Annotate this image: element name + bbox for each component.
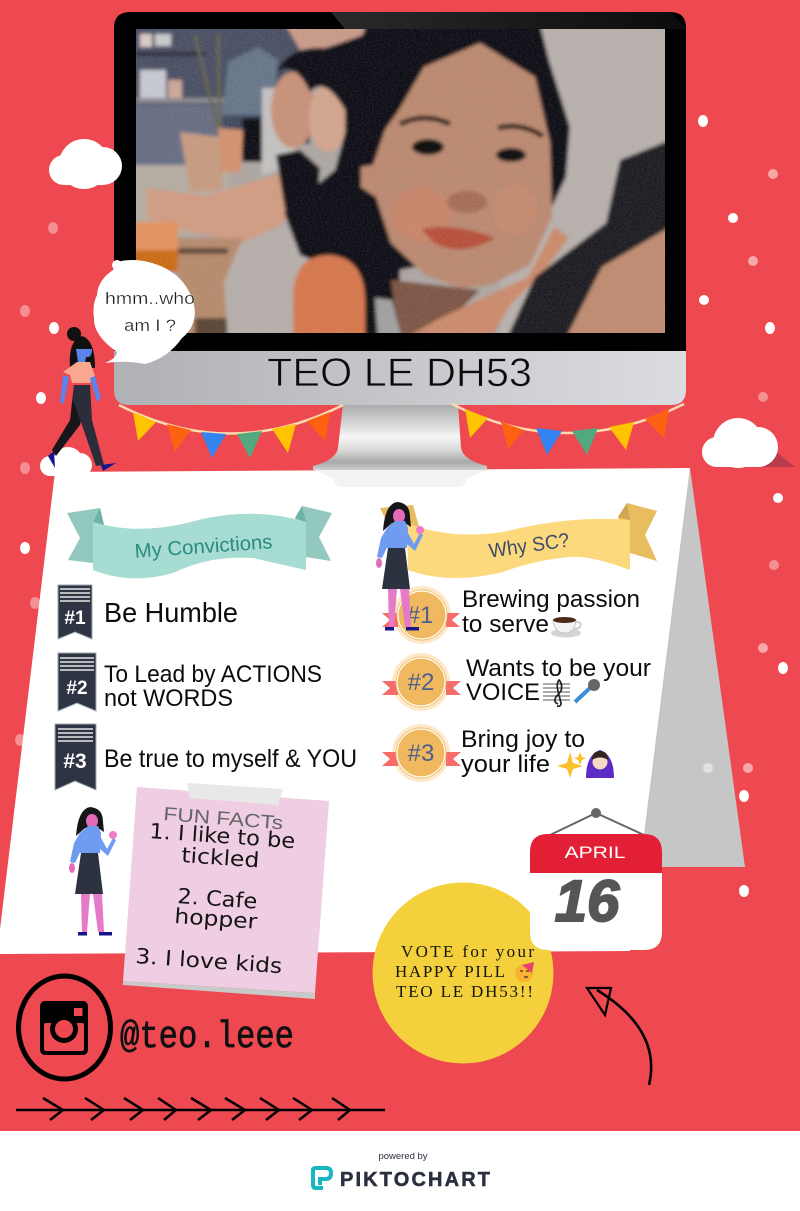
sticky note: fun facts: 2. Cafe xyxy=(177,884,258,914)
speech bubble: hmm..who xyxy=(105,289,195,308)
sticky note: fun facts: hopper xyxy=(174,904,259,934)
vote circle: TEO LE DH53!! xyxy=(396,982,533,1001)
piktochart logo mark xyxy=(313,1168,331,1188)
icon: musical score xyxy=(543,680,570,706)
dot on card panel xyxy=(703,763,713,773)
white standing card xyxy=(0,468,690,954)
medal 3 xyxy=(382,724,461,782)
conviction 1: Be Humble xyxy=(104,597,238,628)
conviction 1 xyxy=(58,585,238,639)
bookmark badge 3 xyxy=(55,724,96,790)
monitor stand xyxy=(313,404,487,487)
standing woman: bottom xyxy=(69,807,117,936)
icon: party face xyxy=(515,962,534,982)
conviction 3: Be true to myself & YOU xyxy=(104,745,357,773)
back panel of standing card xyxy=(640,468,745,867)
conviction 2: not WORDS xyxy=(104,685,233,712)
small cloud under walking figure xyxy=(40,447,92,477)
icon: microphone xyxy=(575,679,600,702)
medal 1 xyxy=(382,586,460,644)
walking woman xyxy=(48,327,116,471)
instagram handle: @teo.leee xyxy=(120,1016,294,1059)
conviction 2: To Lead by ACTIONS xyxy=(104,661,322,688)
bookmark badge 2 xyxy=(58,653,96,711)
heading ribbon: my convictions: My Convictions xyxy=(134,531,273,563)
sticky note: fun facts: 3. I love kids xyxy=(135,944,283,978)
reason 1: to serve xyxy=(462,611,549,638)
monitor chin xyxy=(114,345,686,405)
speech bubble: am I ? xyxy=(124,316,176,335)
confetti dots xyxy=(15,115,788,897)
footer: PIKTOCHART xyxy=(340,1169,490,1191)
icon: coffee cup xyxy=(551,617,581,638)
medal 2: #2 xyxy=(408,669,434,696)
vote circle xyxy=(372,882,554,1064)
speech bubble xyxy=(93,260,195,364)
sticky note: fun facts: tickled xyxy=(181,843,260,872)
standing woman: top xyxy=(376,502,424,630)
portrait photo xyxy=(130,24,670,340)
conviction 3 xyxy=(55,724,357,790)
icon: sparkles xyxy=(557,752,586,778)
sticky note: fun facts: 1. I like to be xyxy=(149,819,296,853)
heading ribbon: my convictions xyxy=(67,506,332,578)
arrow line with chevrons xyxy=(16,1098,385,1120)
reason 2: VOICE xyxy=(466,679,540,706)
calendar: 16 xyxy=(555,869,620,934)
heading ribbon: why sc: Why SC? xyxy=(488,530,571,563)
vote circle: VOTE for your xyxy=(401,942,534,961)
cloud: right xyxy=(702,418,795,468)
medal 3: #3 xyxy=(408,740,434,767)
vote circle: HAPPY PILL xyxy=(395,962,505,981)
bunting: right xyxy=(452,404,684,455)
bookmark badge 1 xyxy=(58,585,92,639)
conviction 2 xyxy=(58,653,322,712)
reason 2: Wants to be your xyxy=(466,655,651,682)
bookmark badge 1: #1 xyxy=(64,608,86,629)
reason 1 xyxy=(382,586,640,644)
cloud: top left xyxy=(49,139,122,189)
calendar: APRIL xyxy=(564,843,626,862)
monitor name: TEO LE DH53 xyxy=(267,351,532,395)
monitor xyxy=(114,12,686,487)
reason 2 xyxy=(382,653,651,711)
hand-drawn arrow xyxy=(587,988,651,1085)
monitor screen bezel xyxy=(114,12,686,351)
calendar xyxy=(530,808,662,950)
reason 1: Brewing passion xyxy=(462,586,640,613)
medal 2 xyxy=(382,653,461,711)
medal 1: #1 xyxy=(407,602,433,629)
icon: person gesturing xyxy=(586,750,614,778)
instagram icon xyxy=(18,976,110,1079)
sticky note: fun facts: FUN FACTs xyxy=(163,804,284,834)
bookmark badge 2: #2 xyxy=(66,678,88,699)
sticky note: fun facts xyxy=(123,783,329,999)
footer: powered by xyxy=(378,1151,428,1162)
heading ribbon: why sc xyxy=(380,503,657,578)
bunting: left xyxy=(119,405,343,458)
reason 3: Bring joy to xyxy=(461,726,585,753)
reason 3 xyxy=(382,724,614,782)
reason 3: your life xyxy=(461,751,550,778)
bookmark badge 3: #3 xyxy=(63,750,87,773)
footer xyxy=(0,1131,800,1211)
